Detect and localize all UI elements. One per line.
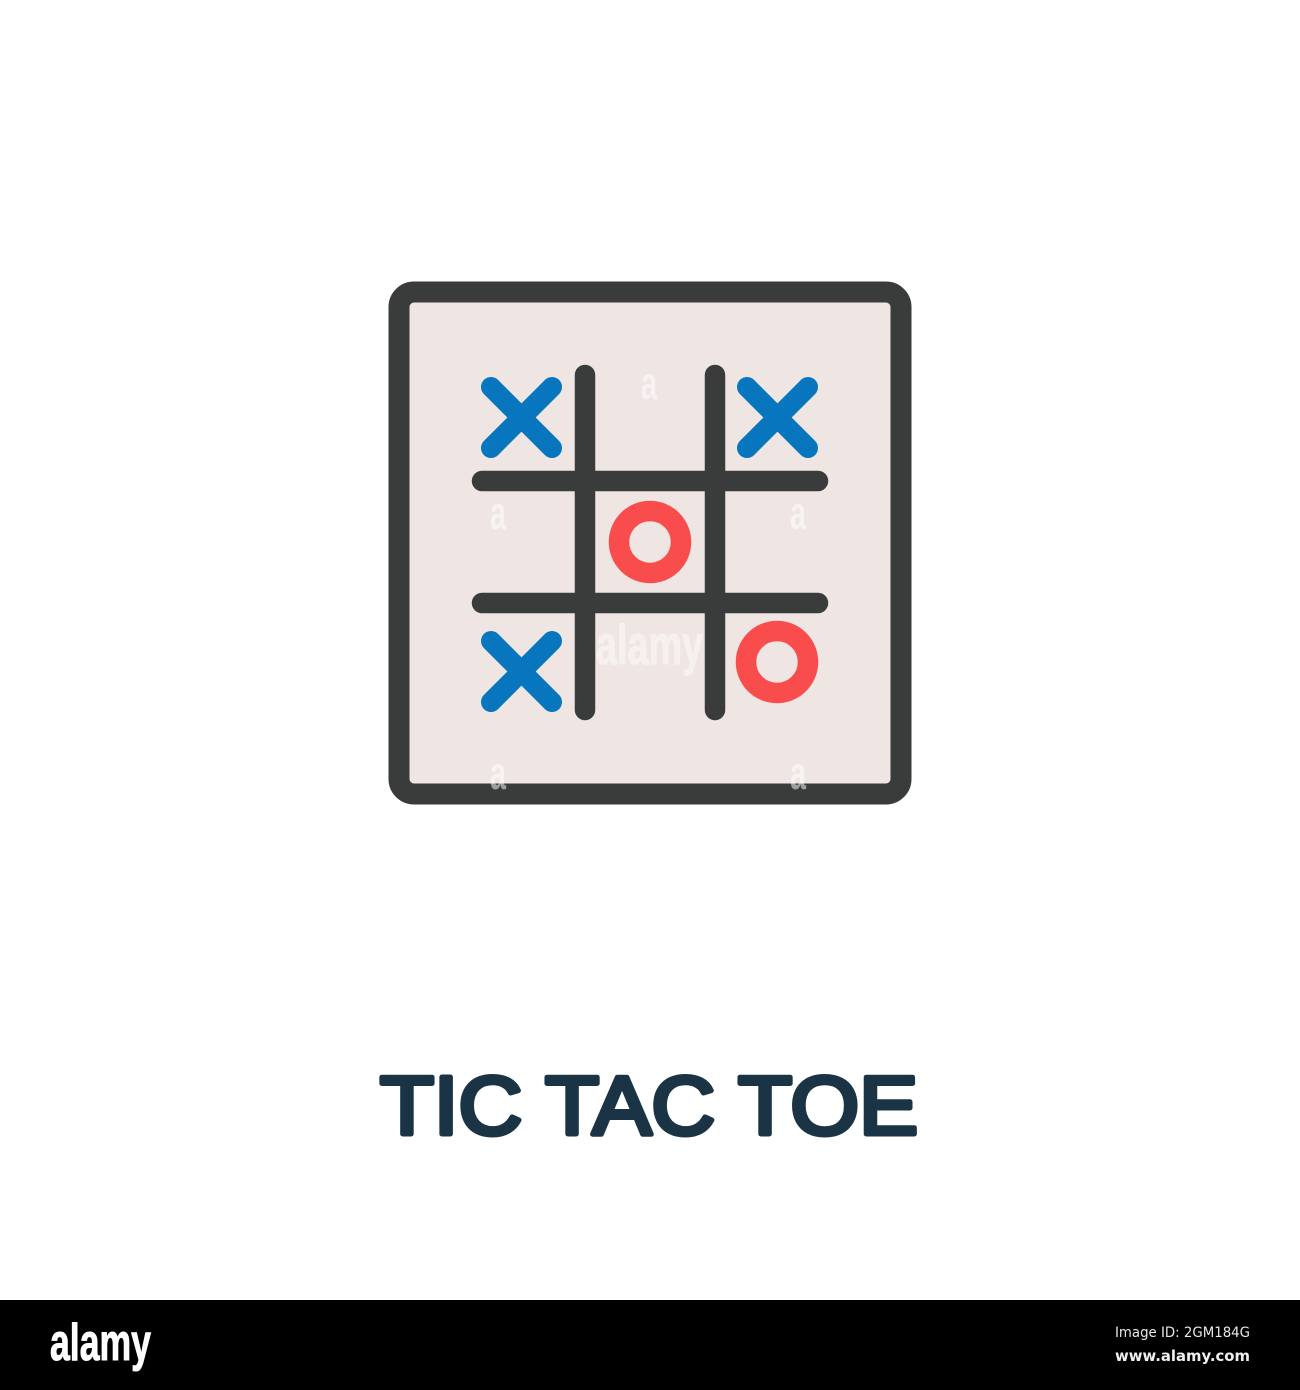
- watermarks: small a marks: a: [490, 747, 506, 799]
- grid lines: [482, 375, 818, 710]
- watermarks: small a marks: [490, 357, 806, 799]
- watermarks: small a marks: a: [641, 357, 657, 409]
- watermarks: small a marks: a: [490, 487, 506, 539]
- watermarks: small a marks: a: [790, 747, 806, 799]
- blue X marks: [491, 387, 808, 702]
- title: TIC TAC TOE: [380, 1059, 918, 1152]
- watermark: alamy: alamy: [596, 613, 703, 676]
- icon: tic tac toe board: [399, 292, 901, 799]
- footer logo: alamy: [50, 1314, 151, 1372]
- board frame: [399, 292, 901, 794]
- footer bar: [0, 1300, 1300, 1390]
- footer image id: Image ID: 2GM184G: [1115, 1325, 1250, 1341]
- watermarks: small a marks: a: [790, 487, 806, 539]
- red O marks: [619, 511, 808, 693]
- footer url: www.alamy.com: [1115, 1347, 1250, 1365]
